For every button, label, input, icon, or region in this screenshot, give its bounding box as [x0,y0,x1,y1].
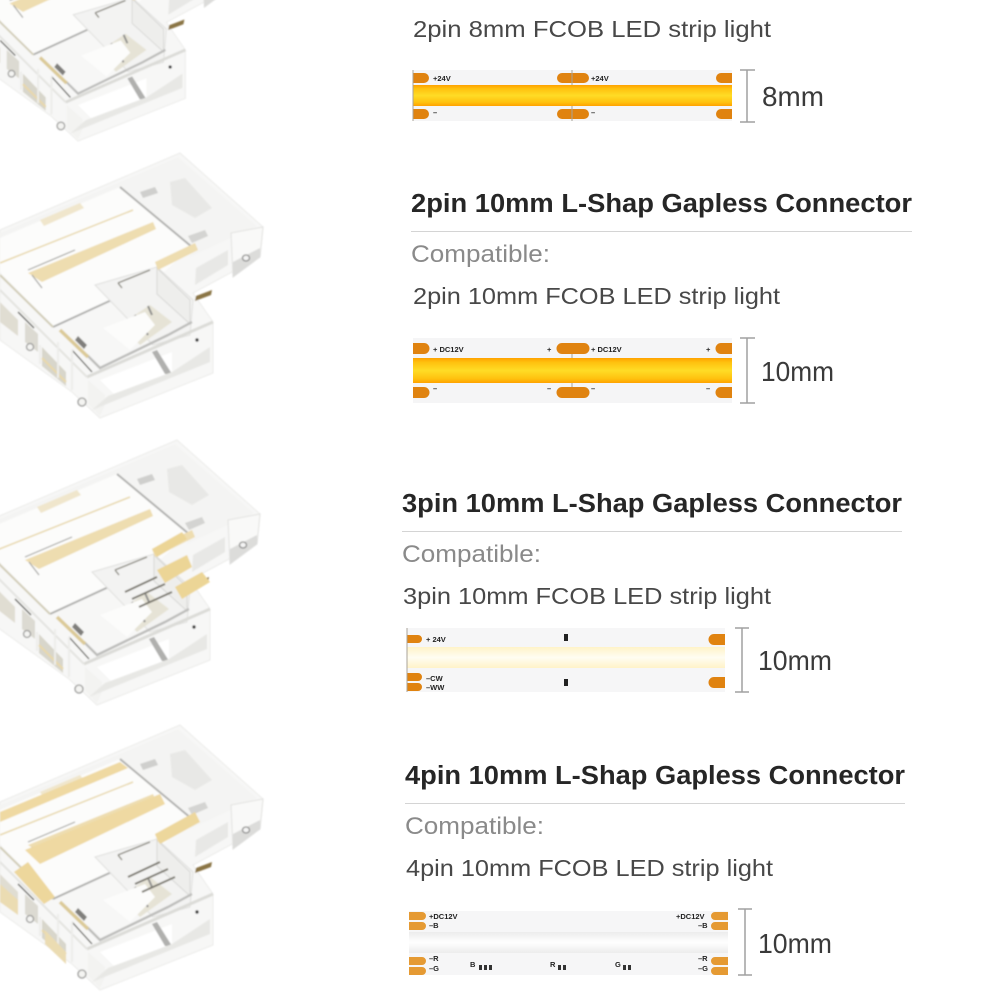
strip: 2pin 10mm amber: + [706,345,711,354]
dimension: 10mm [738,909,832,975]
dimension: 10mm [740,338,834,403]
strip: 3pin 10mm tunable white: –CW [426,674,444,683]
strip: 4pin 10mm RGBW: –B [429,921,439,930]
strip: 2pin 8mm amber: – [433,108,437,117]
strip: 4pin 10mm RGBW: +DC12V [676,912,705,921]
strip: 2pin 10mm amber: + DC12V [591,345,622,354]
strip: 2pin 10mm amber: + [547,345,552,354]
caption: compatible 2pin 10mm strip: 2pin 10mm FCOB LED strip light [413,283,780,309]
strip: 2pin 8mm amber: – [591,108,595,117]
strip: 3pin 10mm tunable white [407,628,725,692]
strip: 4pin 10mm RGBW [409,911,728,975]
strip: 2pin 10mm amber: – [591,384,595,393]
strip: 2pin 8mm amber [413,70,732,121]
label: compatible: Compatible: [411,241,550,268]
strip: 4pin 10mm RGBW: +DC12V [429,912,458,921]
label: compatible: Compatible: [402,541,541,568]
strip: 4pin 10mm RGBW: R [550,960,556,969]
strip: 2pin 10mm amber: + DC12V [433,345,464,354]
strip: 4pin 10mm RGBW: –R [429,954,439,963]
strip: 4pin 10mm RGBW: G [615,960,621,969]
strip: 4pin 10mm RGBW: –R [698,954,708,963]
dimension: 10mm: 10mm [758,645,832,676]
strip: 3pin 10mm tunable white: –WW [426,683,445,692]
strip: 2pin 8mm amber: +24V [591,74,609,83]
strip: 4pin 10mm RGBW: B [470,960,476,969]
caption: compatible 3pin 10mm strip: 3pin 10mm FCOB LED strip light [403,583,771,609]
heading: 4pin 10mm connector: 4pin 10mm L-Shap Gapless Connector [405,762,905,790]
connector photo: 2pin 10mm [0,153,263,418]
dimension: 8mm [740,70,824,122]
strip: 3pin 10mm tunable white: + 24V [426,635,446,644]
strip: 4pin 10mm RGBW: –B [698,921,708,930]
dimension: 10mm: 10mm [761,356,834,387]
connector photo: 4pin 10mm [0,725,263,990]
strip: 2pin 10mm amber: – [547,384,551,393]
strip: 4pin 10mm RGBW: –G [429,964,439,973]
strip: 4pin 10mm RGBW: –G [698,964,708,973]
caption: compatible 2pin 8mm strip: 2pin 8mm FCOB LED strip light [413,16,772,42]
strip: 2pin 10mm amber [413,338,732,403]
strip: 2pin 10mm amber: – [706,384,710,393]
dimension: 8mm: 8mm [762,81,824,112]
dimension: 10mm [735,628,832,692]
label: compatible: Compatible: [405,813,544,840]
strip: 2pin 10mm amber: – [433,384,437,393]
caption: compatible 4pin 10mm strip: 4pin 10mm FCOB LED strip light [406,855,773,881]
connector photo: 2pin 8mm [0,0,233,141]
connector photo: 3pin 10mm [0,440,260,705]
heading: 3pin 10mm connector: 3pin 10mm L-Shap Gapless Connector [402,490,902,518]
heading: 2pin 10mm connector: 2pin 10mm L-Shap Gapless Connector [411,190,912,218]
strip: 2pin 8mm amber: +24V [433,74,451,83]
dimension: 10mm: 10mm [758,928,832,959]
